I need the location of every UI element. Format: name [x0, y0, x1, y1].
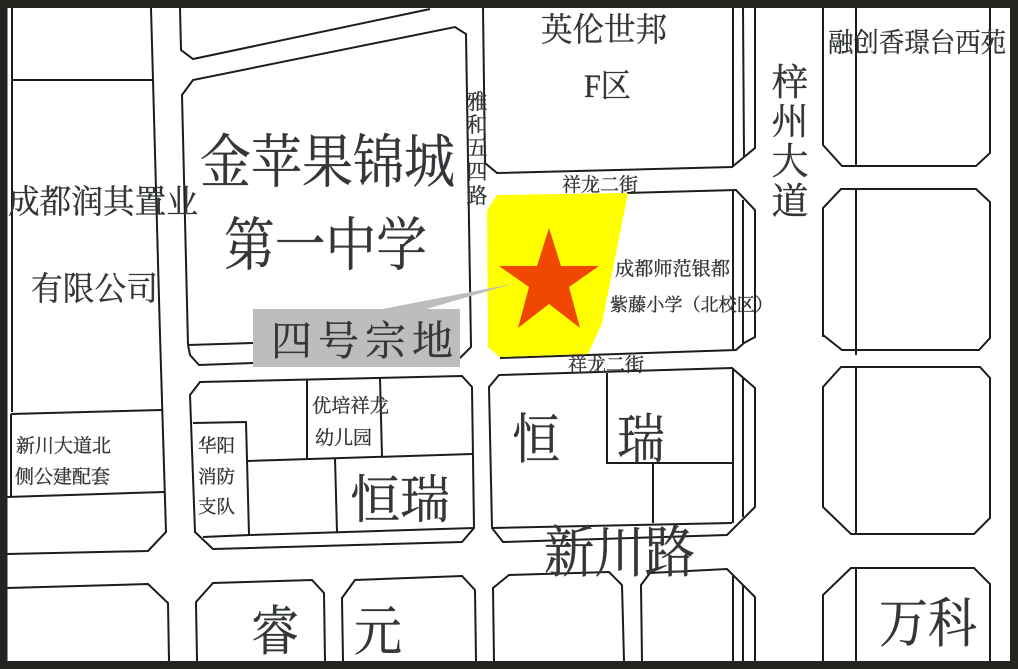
- label: Ruiyuan: 元: [354, 602, 402, 662]
- label: vertical road Yahe: 和: [466, 113, 488, 137]
- label: fire brigade: 消防: [198, 467, 235, 487]
- label: public facilities: [15, 435, 111, 488]
- label: Ruiyuan: [251, 602, 402, 662]
- label: Ruiyuan: 睿: [251, 602, 299, 662]
- label: Xinchuan Road: 新川路: [544, 523, 695, 585]
- label: public facilities: 侧公建配套: [15, 466, 110, 488]
- label: Vanke: 万科: [879, 594, 977, 654]
- label: vertical road Zizhou Avenue: 州: [772, 102, 808, 143]
- label: primary school: 紫藤小学（北校区）: [610, 295, 773, 315]
- site parcel: yellow plot: [487, 193, 628, 357]
- label: primary school: 成都师范银都: [615, 258, 730, 280]
- label: Rongchuang: 融创香璟台西苑: [828, 28, 1006, 58]
- label: public facilities: 新川大道北: [16, 435, 111, 457]
- label: Yinglun Shibang F zone: [541, 12, 667, 105]
- label: Xianglong 2nd street south: 祥龙二街: [568, 354, 644, 376]
- label: vertical road Yahe: 五: [466, 136, 488, 160]
- label: company: 成都润其置业: [8, 184, 198, 221]
- label: company: [8, 184, 198, 308]
- label: Xianglong 2nd street north: 祥龙二街: [562, 174, 638, 196]
- label: vertical road Yahe: 雅: [466, 90, 488, 114]
- label: Yinglun Shibang F zone: 英伦世邦: [541, 12, 667, 49]
- label: fire brigade: [198, 436, 235, 517]
- label: kindergarten: 幼儿园: [315, 427, 372, 449]
- label: primary school: [610, 258, 773, 315]
- label: fire brigade: 华阳: [198, 436, 235, 456]
- label: school name: 金苹果锦城: [200, 130, 455, 195]
- callout: site label: 四号宗地: [271, 318, 453, 364]
- callout: site label: [253, 309, 460, 367]
- label: school name: 第一中学: [224, 213, 427, 278]
- label: vertical road Zizhou Avenue: 道: [772, 181, 808, 223]
- label: kindergarten: [312, 395, 389, 449]
- icon: red star: [499, 228, 599, 328]
- label: school name: [200, 130, 455, 278]
- label: Hengrui east: 恒: [512, 410, 560, 470]
- label: Hengrui west: 恒瑞: [350, 473, 450, 530]
- label: Hengrui east: [512, 410, 665, 470]
- label: Hengrui east: 瑞: [617, 410, 665, 470]
- label: company: 有限公司: [31, 271, 158, 308]
- label: Yinglun Shibang F zone: F区: [584, 69, 631, 105]
- label: vertical road Zizhou Avenue: 梓: [772, 62, 808, 104]
- label: kindergarten: 优培祥龙: [312, 395, 389, 417]
- label: fire brigade: 支队: [198, 497, 235, 517]
- label: vertical road Yahe: 路: [466, 184, 488, 208]
- label: vertical road Yahe: 四: [466, 160, 488, 184]
- label: vertical road Zizhou Avenue: [772, 62, 808, 223]
- label: vertical road Zizhou Avenue: 大: [772, 142, 808, 183]
- label: vertical road Yahe: [466, 90, 488, 208]
- callout: pointer to site: [377, 284, 512, 310]
